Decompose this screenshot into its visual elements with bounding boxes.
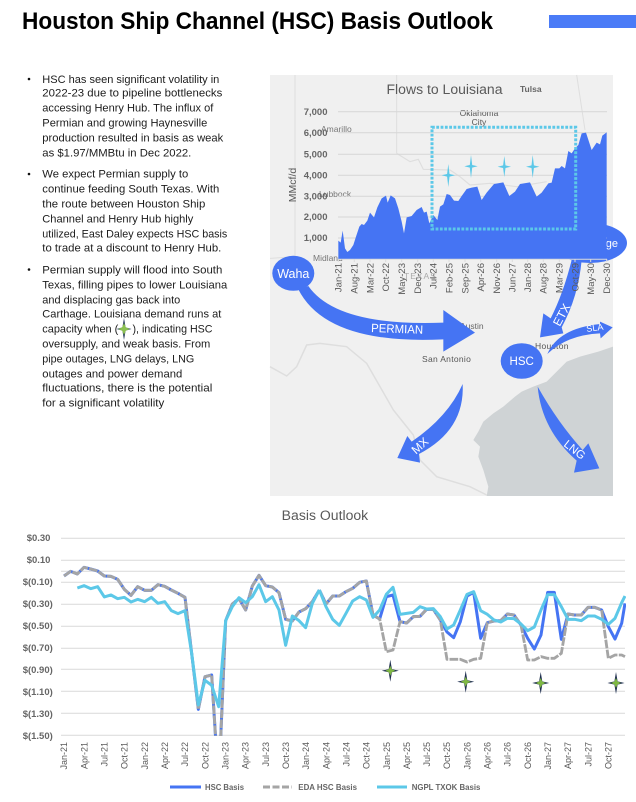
bullet point 3: outages and power demand — [42, 368, 182, 380]
bullet point 2: utilized, East Daley expects HSC basis — [42, 228, 228, 240]
bullet point 2: the route between Houston Ship — [42, 198, 205, 210]
bullet point 3: and displacing gas back into — [42, 294, 180, 306]
node: Waha — [272, 256, 314, 291]
y axis labels: $(0.30) — [23, 599, 53, 610]
x axis labels: Apr-23 — [241, 742, 251, 769]
header accent bar — [549, 15, 636, 28]
bullet point 2: Channel and Henry Hub highly — [42, 213, 194, 225]
x axis labels — [59, 742, 613, 770]
x axis labels: Mar-22 — [365, 263, 376, 293]
arrow: MX — [397, 384, 463, 463]
gulf water — [473, 347, 613, 496]
state border lines — [270, 75, 585, 495]
legend: NGPL TXOK Basis — [412, 782, 481, 792]
x axis labels — [334, 263, 613, 295]
x axis labels: Feb-25 — [444, 263, 455, 293]
arrow: Permian: PERMIAN — [371, 321, 423, 337]
x axis labels: Oct-22 — [200, 742, 210, 769]
y axis title: MMcf/d — [287, 168, 299, 202]
panel: flow map — [270, 75, 627, 496]
arrow: LNG: LNG — [561, 438, 587, 462]
y axis labels — [23, 533, 53, 742]
arrow: MX: MX — [409, 434, 431, 457]
arrow: SLA: SLA — [586, 322, 604, 334]
y axis labels: 1,000 — [304, 233, 328, 244]
series: EDA HSC Basis — [63, 566, 626, 736]
bullet point 1: Permian and growing Haynesville — [42, 118, 207, 130]
x axis labels: Oct-23 — [281, 742, 291, 769]
node: Waha: Waha — [277, 267, 309, 281]
x axis labels: Oct-27 — [604, 742, 614, 769]
x axis labels: Aug-28 — [539, 263, 550, 294]
y axis labels: $(0.90) — [23, 665, 53, 676]
x axis labels: Jan-21 — [59, 742, 69, 770]
legend — [170, 782, 481, 792]
bullet point 1: production resulted in basis as weak — [42, 133, 224, 145]
city labels: Amarillo — [321, 124, 352, 134]
bullet point 3: Permian supply will flood into South — [42, 264, 222, 276]
y axis labels — [304, 107, 328, 244]
arrow: Permian — [298, 286, 475, 352]
x axis labels: Jul-24 — [429, 263, 440, 289]
text block: key points — [28, 74, 228, 410]
city labels: Oklahoma — [460, 108, 499, 118]
bullet point 3: Carthage. Louisiana demand runs at — [42, 309, 221, 321]
bullet point 3: pipe outages, LNG delays, LNG — [42, 353, 194, 365]
bullet point 3: oversupply, and weak basis. From — [42, 338, 210, 350]
icon: inline star marker — [116, 318, 132, 340]
series: HSC Basis — [63, 566, 626, 736]
x axis labels: Apr-27 — [563, 742, 573, 769]
bullet point 1: as $1.97/MMBtu in Dec 2022. — [42, 148, 191, 160]
city labels: TEXAS — [404, 271, 437, 281]
x axis labels: Jul-27 — [583, 742, 593, 767]
bullet point 3 — [28, 264, 228, 410]
x axis labels: May-23 — [397, 263, 408, 295]
city labels: City — [472, 117, 487, 127]
y axis labels: $0.10 — [27, 555, 50, 566]
x axis labels: Jul-25 — [422, 742, 432, 767]
arrow: ETX — [540, 260, 582, 337]
bullet point 2: continue feeding South Texas. With — [42, 184, 219, 196]
line series — [63, 566, 626, 736]
x axis labels: Oct-22 — [381, 263, 392, 292]
bullet point 3: Texas, filling pipes to lower Louisiana — [42, 279, 228, 291]
bullet point 1 — [28, 74, 224, 160]
legend: EDA HSC Basis — [298, 782, 357, 792]
x axis labels: Sep-25 — [460, 263, 471, 294]
y axis labels: $(1.30) — [23, 709, 53, 720]
x axis labels: Oct-25 — [442, 742, 452, 769]
bullet point 2: to trade at a discount to Henry Hub. — [42, 243, 221, 255]
y axis labels: 3,000 — [304, 192, 328, 202]
bullet point 1: accessing Henry Hub. The influx of — [42, 103, 214, 115]
x axis labels: Jul-23 — [261, 742, 271, 767]
y axis labels: 6,000 — [304, 128, 328, 139]
bullet point 3: ), indicating HSC — [132, 324, 213, 336]
bullet point 2 — [28, 169, 228, 255]
chart: basis outlook — [23, 508, 625, 792]
x axis labels: Apr-24 — [321, 742, 331, 769]
y axis labels: 4,000 — [304, 170, 328, 182]
x axis labels: Jan-21 — [334, 263, 345, 292]
bullet point 3: fluctuations, there is the potential — [42, 383, 212, 395]
title: Houston Ship Channel (HSC) Basis Outlook — [22, 8, 494, 35]
x axis labels: Aug-21 — [350, 263, 361, 294]
icons: cyan stars — [442, 155, 539, 187]
x axis labels: Jan-25 — [382, 742, 392, 770]
y axis labels: 2,000 — [304, 212, 328, 223]
city labels — [313, 84, 569, 364]
x axis labels: Jun-27 — [508, 263, 519, 292]
x axis labels: Jul-24 — [341, 742, 351, 767]
chart title: Basis Outlook — [282, 508, 368, 523]
x axis labels: Oct-26 — [523, 742, 533, 769]
legend: HSC Basis — [205, 782, 244, 792]
x axis labels: Jan-22 — [140, 742, 150, 770]
bullet point 3: capacity when ( — [42, 324, 119, 336]
arrow: SLA — [547, 322, 613, 354]
y axis labels: $(1.10) — [23, 687, 53, 698]
x axis labels: Mar-29 — [555, 263, 566, 293]
map background — [270, 75, 613, 496]
x axis labels: Apr-26 — [483, 742, 493, 769]
x axis labels: Jul-26 — [503, 742, 513, 767]
x axis labels: Jul-22 — [180, 742, 190, 767]
y axis labels: $(1.50) — [23, 731, 53, 742]
y axis labels: 5,000 — [304, 150, 328, 160]
node: Carthage: Carthage — [573, 238, 618, 250]
x axis labels: Apr-22 — [160, 742, 170, 769]
x axis labels: Oct-21 — [120, 742, 130, 769]
city labels: San Antonio — [422, 354, 471, 364]
x axis labels: Oct-29 — [570, 263, 581, 292]
y axis labels: $(0.10) — [23, 577, 53, 588]
chart title: Flows to Louisiana — [386, 82, 503, 97]
x axis labels: Apr-21 — [79, 742, 89, 769]
x axis labels: Jan-26 — [462, 742, 472, 770]
dotted highlight box — [432, 127, 576, 229]
city labels: Tulsa — [520, 84, 542, 94]
icons: capacity star markers — [382, 660, 624, 694]
x axis labels: Oct-24 — [362, 742, 372, 769]
city labels: Lubbock — [319, 189, 352, 199]
y axis labels: $(0.70) — [23, 643, 53, 654]
x axis labels: May-30 — [586, 263, 597, 295]
y axis labels: $(0.50) — [23, 621, 53, 632]
bullet point 3: for a significant volatility — [42, 398, 165, 410]
city labels: Midland — [313, 253, 343, 263]
x axis labels: Dec-23 — [413, 263, 424, 294]
chart: flows to Louisiana — [287, 82, 613, 295]
x axis labels: Jan-28 — [523, 263, 534, 292]
x axis labels: Jan-24 — [301, 742, 311, 770]
x axis labels: Dec-30 — [602, 263, 613, 294]
bullet point 1: HSC has seen significant volatility in — [42, 74, 219, 86]
x axis labels: Apr-25 — [402, 742, 412, 769]
x axis labels: Nov-26 — [492, 263, 503, 294]
area series — [338, 132, 607, 259]
y axis labels: 7,000 — [304, 107, 328, 118]
x axis labels: Apr-26 — [476, 263, 487, 292]
series: NGPL TXOK Basis — [77, 585, 625, 707]
node: Carthage — [553, 223, 627, 263]
bullet point 2: We expect Permian supply to — [42, 169, 188, 181]
arrow: LNG — [538, 387, 599, 473]
x axis labels: Jul-21 — [100, 742, 110, 767]
bullet point 1: 2022-23 due to pipeline bottlenecks — [42, 88, 223, 100]
arrow: ETX: ETX — [550, 301, 573, 328]
city labels: Houston — [535, 341, 569, 351]
y axis labels: $0.30 — [27, 533, 50, 544]
city labels: Austin — [460, 321, 484, 331]
node: HSC — [501, 343, 543, 379]
x axis labels: Jan-23 — [220, 742, 230, 770]
x axis labels: Jan-27 — [543, 742, 553, 770]
node: HSC: HSC — [510, 356, 534, 368]
